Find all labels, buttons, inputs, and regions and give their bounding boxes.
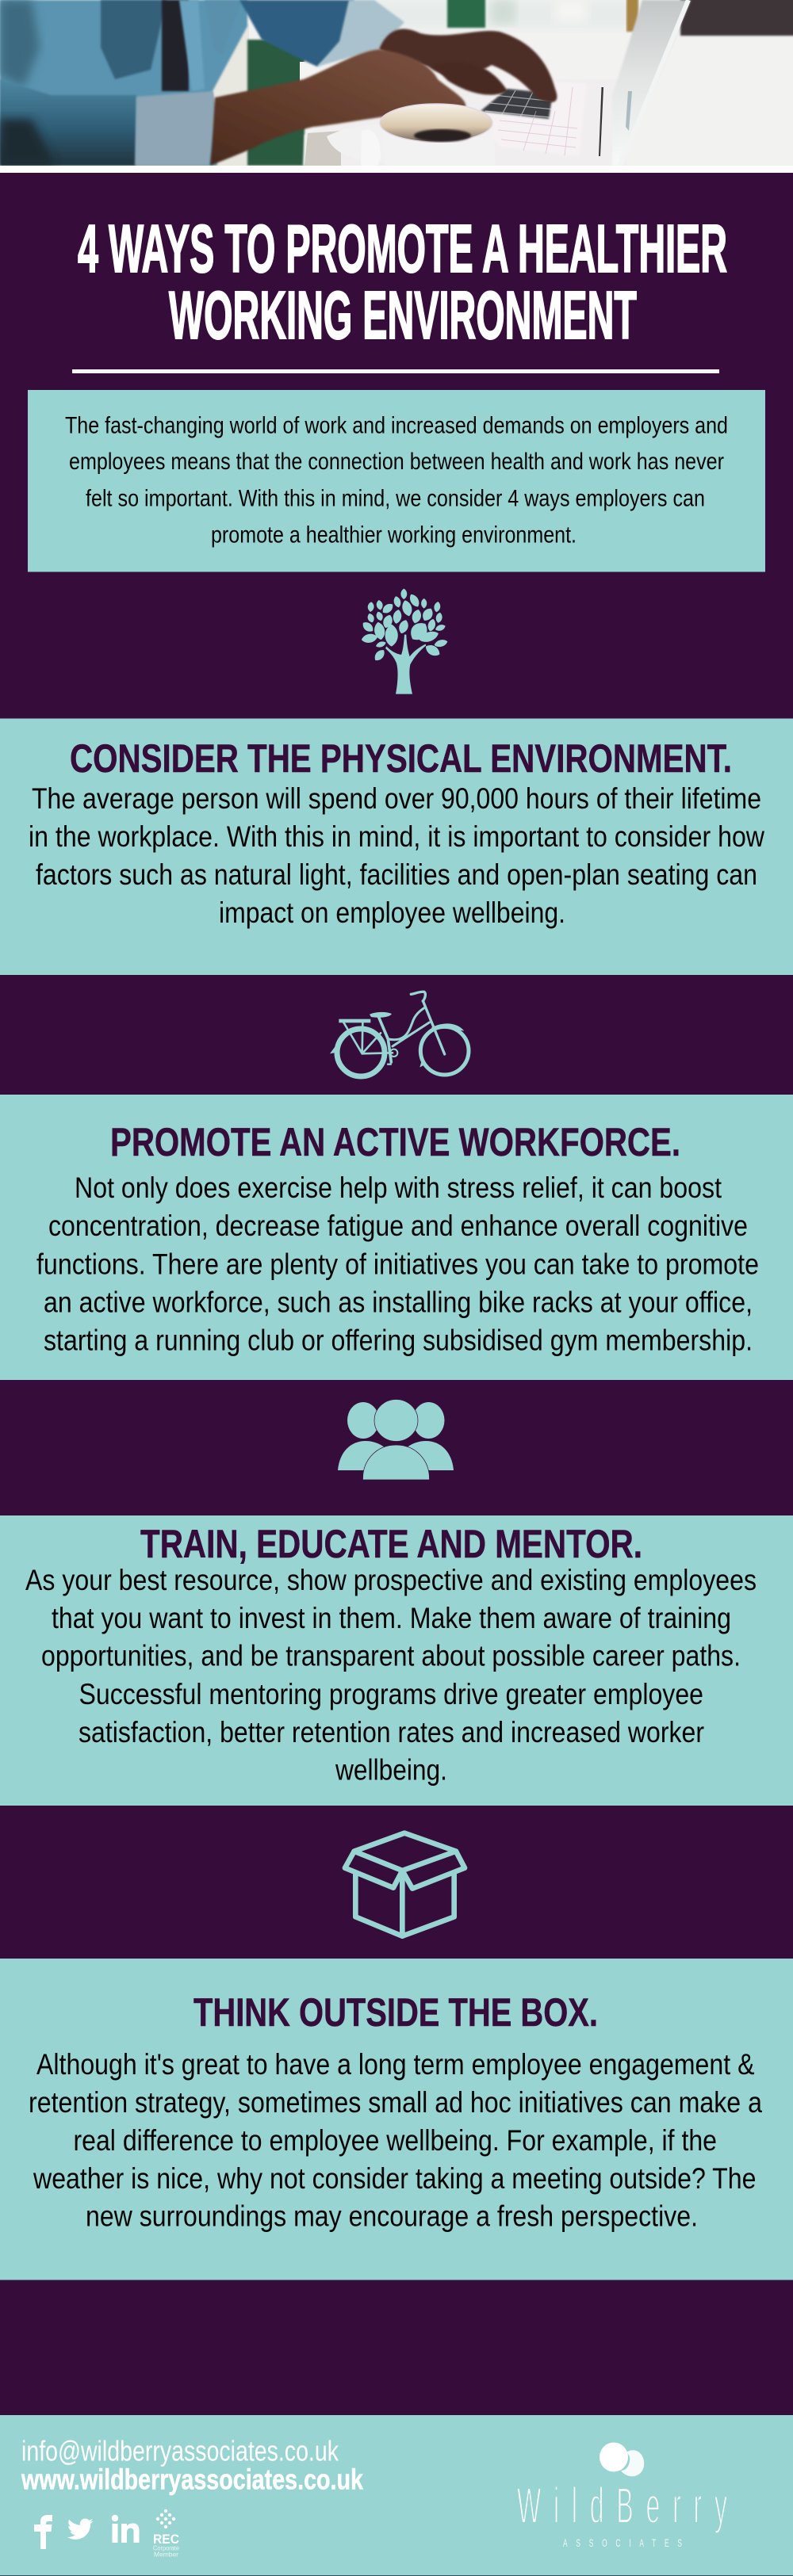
logo: WildBerry Associates: WildBerry — [517, 2477, 727, 2534]
REC corporate member badge — [153, 2509, 180, 2559]
panel: think outside the box: THINK OUTSIDE THE BOX. — [193, 1990, 598, 2035]
far hand — [379, 29, 557, 102]
mouse — [327, 124, 396, 162]
photo: hands typing on a laptop with a coffee cup — [0, 0, 793, 166]
coffee cup — [382, 125, 496, 166]
panel: train, educate and mentor: TRAIN, EDUCATE AND MENTOR. — [140, 1522, 642, 1566]
contact details — [21, 2435, 364, 2495]
icon: facebook — [34, 2515, 52, 2549]
title — [78, 212, 727, 354]
laptop screen — [612, 0, 691, 166]
contact details: info@wildberryassociates.co.uk — [21, 2435, 339, 2467]
icon: bicycle — [330, 992, 469, 1076]
rolled cuff — [135, 91, 217, 166]
panel: train, educate and mentor — [0, 1515, 793, 1806]
bottom edge — [0, 2575, 793, 2576]
sleeve upper arm — [239, 0, 373, 67]
icon: open box — [345, 1833, 465, 1936]
near arm and hand — [210, 49, 465, 166]
logo: WildBerry Associates — [517, 2443, 727, 2550]
REC corporate member badge: Member — [154, 2551, 178, 2559]
icon: tree — [361, 589, 448, 694]
panel: think outside the box: new surroundings may encourage a fresh perspective. — [86, 2199, 698, 2232]
REC corporate member badge: Corporate — [153, 2544, 180, 2552]
icon: twitter — [67, 2519, 93, 2540]
contact details: www.wildberryassociates.co.uk — [21, 2463, 364, 2495]
title underline — [72, 369, 719, 373]
panel: consider the physical environment — [0, 718, 793, 975]
intro panel: promote a healthier working environment. — [211, 522, 577, 548]
REC corporate member badge: REC — [153, 2532, 179, 2547]
panel: promote an active workforce — [0, 1095, 793, 1380]
footer panel — [0, 2415, 793, 2575]
panel: consider the physical environment: impact on employee wellbeing. — [219, 896, 565, 929]
keyboard — [476, 79, 587, 156]
panel: train, educate and mentor: wellbeing. — [335, 1753, 447, 1787]
icon: linkedin — [112, 2515, 140, 2543]
logo: WildBerry Associates: ASSOCIATES — [563, 2538, 682, 2550]
table — [303, 79, 626, 166]
intro panel — [28, 390, 765, 572]
panel: think outside the box — [0, 1959, 793, 2280]
panel: train, educate and mentor: satisfaction, better retention rates and increased worker — [79, 1715, 704, 1749]
shirt torso — [0, 0, 247, 166]
white strip under photo — [0, 166, 793, 173]
icon: group of people — [338, 1400, 454, 1480]
panel: train, educate and mentor: Successful mentoring programs drive greater employee — [79, 1677, 703, 1710]
